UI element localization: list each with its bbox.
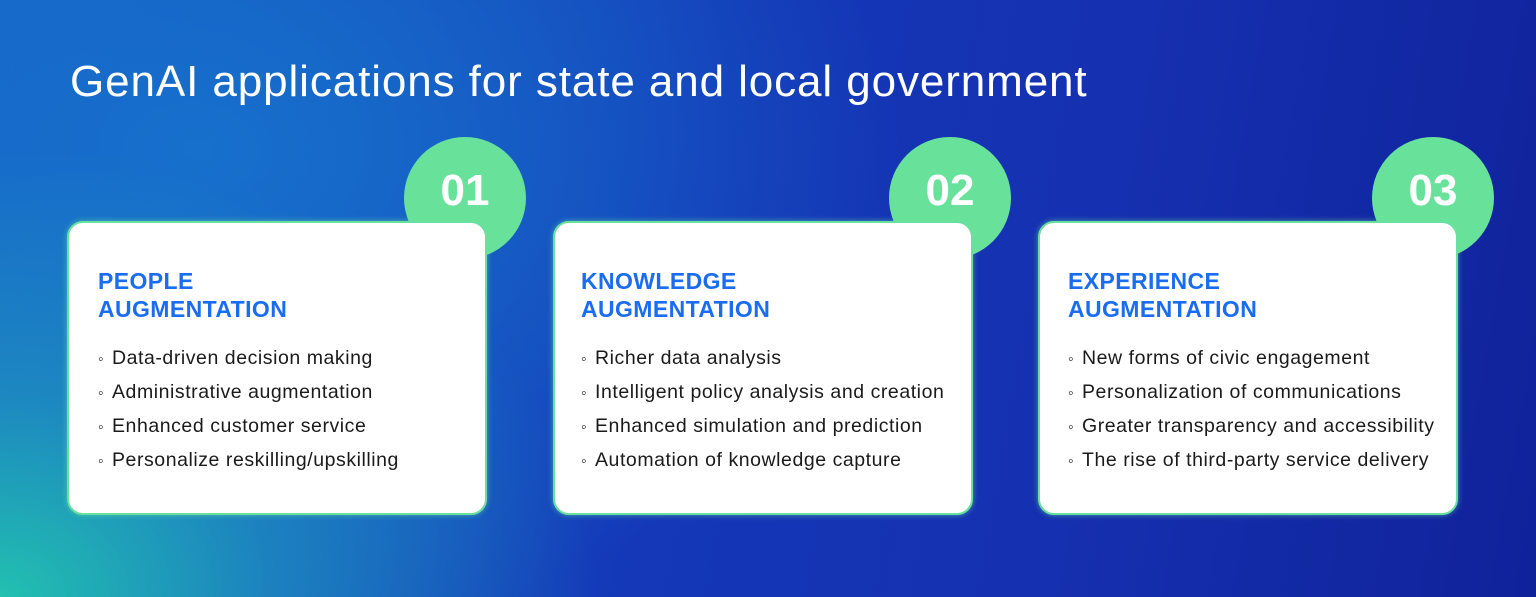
- bullet list: Greater transparency and accessibility: [1082, 415, 1435, 437]
- badge: 01: 01: [441, 166, 489, 215]
- bullet list: Administrative augmentation: [112, 381, 373, 403]
- bullet list: Enhanced simulation and prediction: [595, 415, 923, 437]
- bullet list: Automation of knowledge capture: [595, 449, 901, 471]
- bullet list: Personalization of communications: [1082, 381, 1401, 403]
- panel: knowledge augmentation: [553, 221, 973, 515]
- badge: 03: [1372, 137, 1494, 259]
- heading: PEOPLE: [98, 268, 194, 294]
- heading: KNOWLEDGE: [581, 268, 737, 294]
- bullet list: Data-driven decision making: [112, 347, 373, 369]
- bullet list: [582, 347, 944, 471]
- badge: 02: 02: [926, 166, 974, 215]
- bullet list: Enhanced customer service: [112, 415, 366, 437]
- heading: [1068, 268, 1257, 322]
- badge: 01: [404, 137, 526, 259]
- bullet list: The rise of third-party service delivery: [1082, 449, 1429, 471]
- badge: 03: 03: [1409, 166, 1457, 215]
- panel: people augmentation: [67, 221, 487, 515]
- badge: 02: [889, 137, 1011, 259]
- bullet list: [98, 347, 399, 471]
- heading: AUGMENTATION: [1068, 296, 1257, 322]
- heading: AUGMENTATION: [581, 296, 770, 322]
- bullet list: [1068, 347, 1435, 471]
- bullet list: Personalize reskilling/upskilling: [112, 449, 399, 471]
- heading: AUGMENTATION: [98, 296, 287, 322]
- bullet list: New forms of civic engagement: [1082, 347, 1370, 369]
- bullet list: Intelligent policy analysis and creation: [595, 381, 944, 403]
- panel: experience augmentation: [1038, 221, 1458, 515]
- bullet list: Richer data analysis: [595, 347, 782, 369]
- title: GenAI applications for state and local government: [70, 57, 1088, 106]
- heading: EXPERIENCE: [1068, 268, 1220, 294]
- heading: [98, 268, 287, 322]
- heading: [581, 268, 770, 322]
